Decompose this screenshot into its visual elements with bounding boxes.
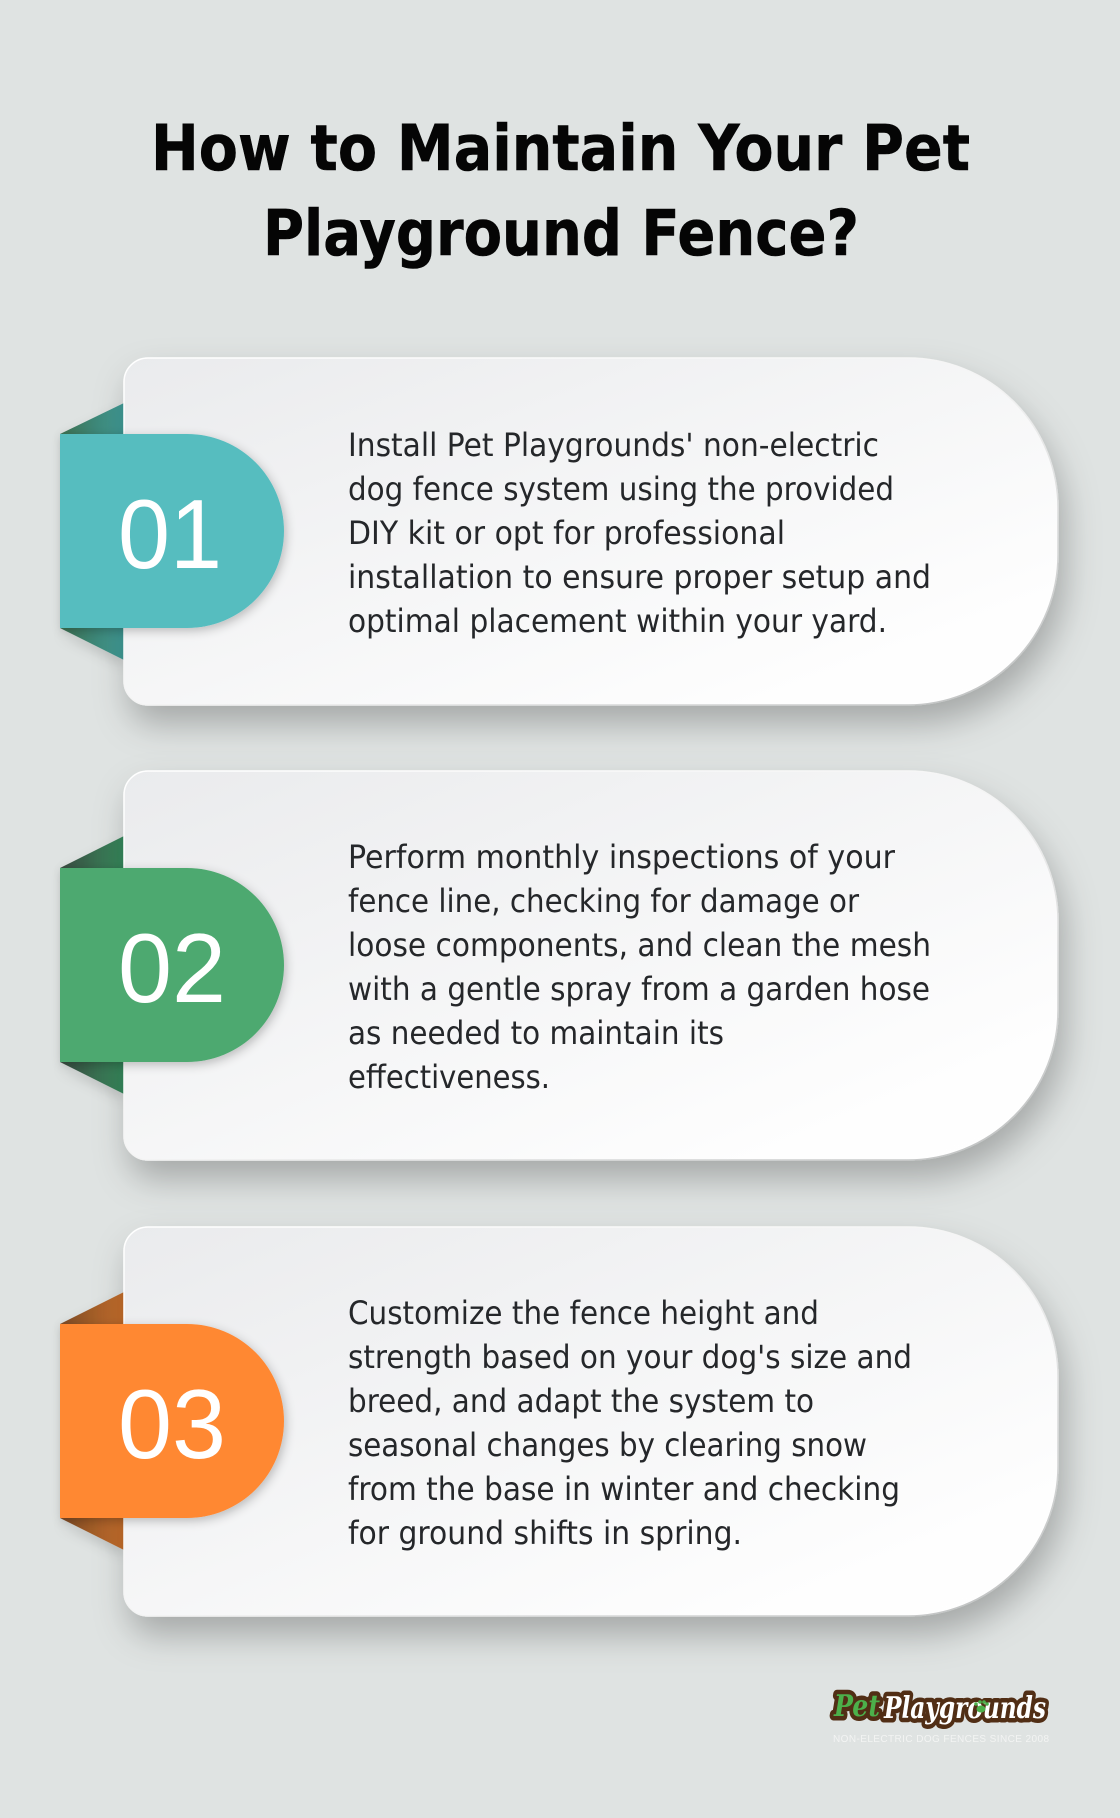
text: step 02: fence line, checking for damage or — [348, 882, 860, 920]
ribbon folds: step 02 — [60, 836, 124, 1094]
text: step 02: effectiveness. — [348, 1058, 550, 1096]
logo wordmark: Pet — [833, 1689, 880, 1724]
panel: step 03 — [60, 1227, 1058, 1616]
text: step 01: installation to ensure proper setup and — [348, 558, 931, 596]
text: step 02: Perform monthly inspections of your — [348, 838, 896, 876]
ribbon folds: step 03 — [60, 1292, 124, 1550]
text: step 03: breed, and adapt the system to — [348, 1382, 814, 1420]
logo: Pet Playgrounds — [833, 1689, 1049, 1745]
ribbon folds: step 01 — [60, 403, 124, 660]
panel: step 02 — [60, 771, 1058, 1160]
text: step 02 — [348, 838, 931, 1096]
text: step 03: strength based on your dog's size and — [348, 1338, 912, 1376]
logo wordmark — [833, 1689, 1046, 1726]
logo tagline: NON-ELECTRIC DOG FENCES SINCE 2008 — [833, 1734, 1049, 1745]
text: step 01: Install Pet Playgrounds' non-electric — [348, 426, 879, 464]
badge: 01 — [60, 434, 284, 628]
text: step 02: as needed to maintain its — [348, 1014, 724, 1052]
text: step 03: from the base in winter and checking — [348, 1470, 900, 1508]
logo wordmark: Playgrounds — [883, 1691, 1046, 1726]
number: 03: 03 — [118, 1369, 226, 1479]
text: step 02: with a gentle spray from a garden hose — [348, 970, 930, 1008]
number: 02: 02 — [118, 913, 226, 1023]
title: How to Maintain Your Pet — [151, 112, 970, 185]
text: step 03 — [348, 1294, 912, 1552]
text: step 01: optimal placement within your yard. — [348, 602, 887, 640]
text: step 03: seasonal changes by clearing snow — [348, 1426, 867, 1464]
card: step 02 — [124, 771, 1058, 1160]
text: step 02: loose components, and clean the mesh — [348, 926, 931, 964]
title — [151, 112, 970, 270]
panel: step 01 — [60, 358, 1058, 705]
title: Playground Fence? — [263, 197, 859, 270]
text: step 03: for ground shifts in spring. — [348, 1514, 742, 1552]
icon: green paw — [974, 1700, 989, 1712]
text: step 03: Customize the fence height and — [348, 1294, 819, 1332]
card: step 03 — [124, 1227, 1058, 1616]
number: 01: 01 — [118, 479, 222, 589]
text: step 01: dog fence system using the provided — [348, 470, 894, 508]
card: step 01 — [124, 358, 1058, 705]
badge: 03 — [60, 1324, 284, 1518]
text: step 01: DIY kit or opt for professional — [348, 514, 785, 552]
text: step 01 — [348, 426, 931, 640]
badge: 02 — [60, 868, 284, 1062]
